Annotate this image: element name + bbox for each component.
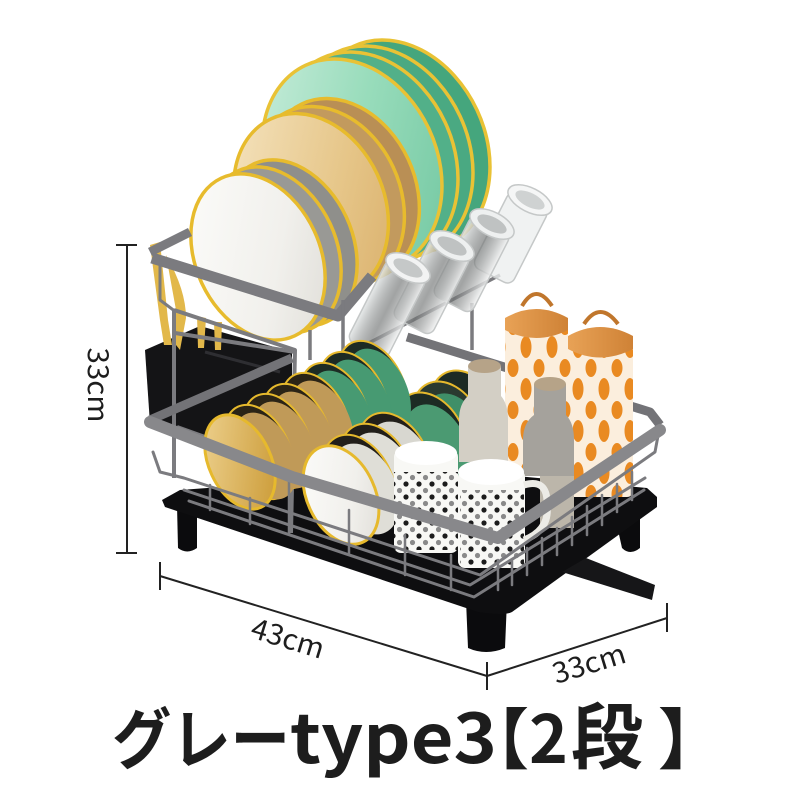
width dimension: 43cm: 43cm — [247, 607, 330, 668]
title: 【2 — [463, 687, 568, 783]
grey and white bottles — [459, 359, 574, 528]
tall orange jars — [505, 294, 633, 497]
glasses on the rack — [345, 178, 557, 361]
black utensil basket — [145, 326, 292, 440]
height dimension: 33cm — [79, 245, 137, 553]
green bowls, lower rack — [286, 330, 519, 502]
title: 段 — [571, 679, 643, 784]
black drip tray with feet and spout — [162, 470, 657, 652]
upper wire rack — [150, 232, 500, 533]
title: 】 — [658, 687, 724, 783]
width dimension: 43cm — [160, 562, 487, 690]
tan plates, top rack — [205, 73, 448, 322]
white bowls, lower rack — [288, 401, 449, 556]
lower wire rack — [150, 422, 660, 597]
title: グレー — [112, 687, 290, 783]
gold cutlery in basket — [150, 242, 222, 350]
title — [112, 679, 724, 784]
tan bowls, lower rack — [191, 362, 367, 520]
height dimension: 33cm: 33cm — [79, 348, 119, 422]
green plates, top rack — [228, 10, 524, 301]
depth dimension: 33cm — [487, 603, 667, 693]
white and grey plates, top rack — [165, 138, 383, 362]
polka-dot mugs — [394, 441, 547, 568]
title: type3 — [290, 684, 497, 783]
depth dimension: 33cm: 33cm — [547, 632, 630, 693]
lower rack back and left rim — [150, 337, 660, 425]
